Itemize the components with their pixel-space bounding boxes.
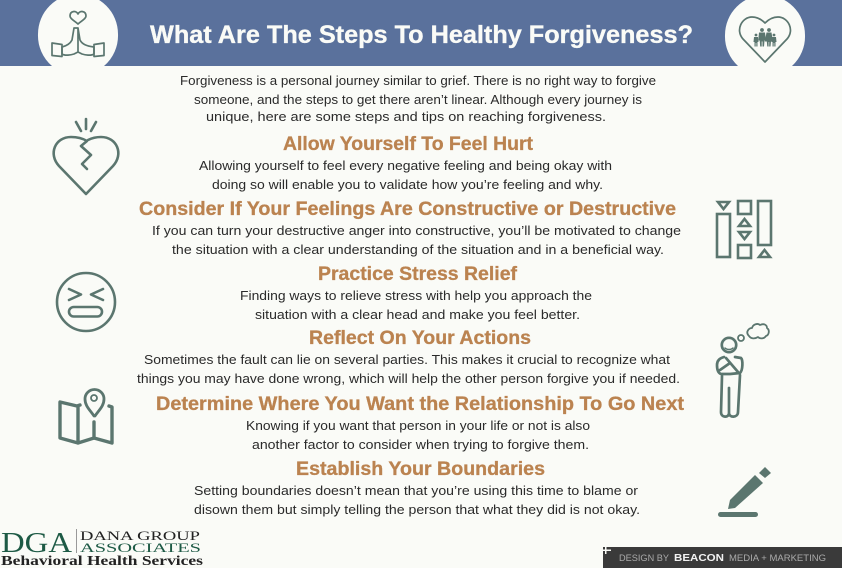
step 5 text: Knowing if you want that person in your life or not is also [246, 419, 590, 433]
logo: Dana Group Associates: DGA [1, 527, 72, 559]
logo: Dana Group Associates: ASSOCIATES [80, 540, 201, 555]
icon: thinking person [717, 324, 769, 417]
footer design credit: MEDIA + MARKETING [729, 553, 826, 563]
header banner [0, 0, 842, 66]
footer design credit: BEACON [674, 553, 724, 564]
logo: Dana Group Associates: Behavioral Health Services [1, 553, 203, 568]
intro text: unique, here are some steps and tips on reaching forgiveness. [206, 110, 606, 124]
logo: Dana Group Associates [1, 527, 203, 568]
intro text: someone, and the steps to get there aren’t linear. Although every journey is [194, 93, 642, 107]
step 2 text: the situation with a clear understanding of the situation and in a beneficial way. [172, 243, 664, 257]
icon: pen writing [718, 467, 771, 517]
step 2 text: If you can turn your destructive anger into constructive, you’ll be motivated to change [152, 224, 681, 238]
intro text: Forgiveness is a personal journey similar to grief. There is no right way to forgive [180, 74, 656, 88]
icon: heart with family [725, 0, 805, 66]
icon: broken heart [54, 119, 118, 194]
step 6 text: Setting boundaries doesn’t mean that you’re using this time to blame or [194, 484, 638, 498]
icon: stressed face [57, 273, 115, 331]
intro text [180, 74, 656, 124]
step 6 heading: Establish Your Boundaries [296, 459, 545, 480]
step 1 text: doing so will enable you to validate how you’re feeling and why. [212, 178, 603, 192]
footer design credit: DESIGN BY [619, 553, 669, 563]
icon: map with pin [60, 390, 112, 443]
step 3 text: Finding ways to relieve stress with help you approach the [240, 289, 592, 303]
step 5 heading: Determine Where You Want the Relationship To Go Next [156, 394, 685, 415]
step 1 heading: Allow Yourself To Feel Hurt [283, 134, 534, 155]
step 3 heading: Practice Stress Relief [318, 264, 518, 285]
step 6 text [194, 484, 640, 517]
step 2 heading: Consider If Your Feelings Are Constructive or Destructive [139, 199, 676, 220]
step 4 text: Sometimes the fault can lie on several parties. This makes it crucial to recognize what [144, 353, 671, 367]
step 4 heading: Reflect On Your Actions [309, 328, 531, 349]
step 1 text: Allowing yourself to feel every negative feeling and being okay with [199, 159, 612, 173]
step 3 text [240, 289, 592, 322]
step 3 text: situation with a clear head and make you feel better. [255, 308, 580, 322]
step 6 text: disown them but simply telling the person that what they did is not okay. [194, 503, 640, 517]
step 4 text: things you may have done wrong, which will help the other person forgive you if needed. [137, 372, 680, 386]
title: What Are The Steps To Healthy Forgiveness? [150, 21, 693, 49]
icon: praying hands with heart [38, 0, 118, 66]
icon: sorting shapes [717, 201, 771, 258]
step 1 text [199, 159, 612, 192]
step 5 text: another factor to consider when trying to forgive them. [252, 438, 589, 452]
footer design credit [603, 547, 842, 568]
step 2 text [152, 224, 681, 257]
logo: Dana Group Associates: DANA GROUP [80, 528, 200, 543]
step 4 text [137, 353, 680, 386]
step 5 text [246, 419, 590, 452]
